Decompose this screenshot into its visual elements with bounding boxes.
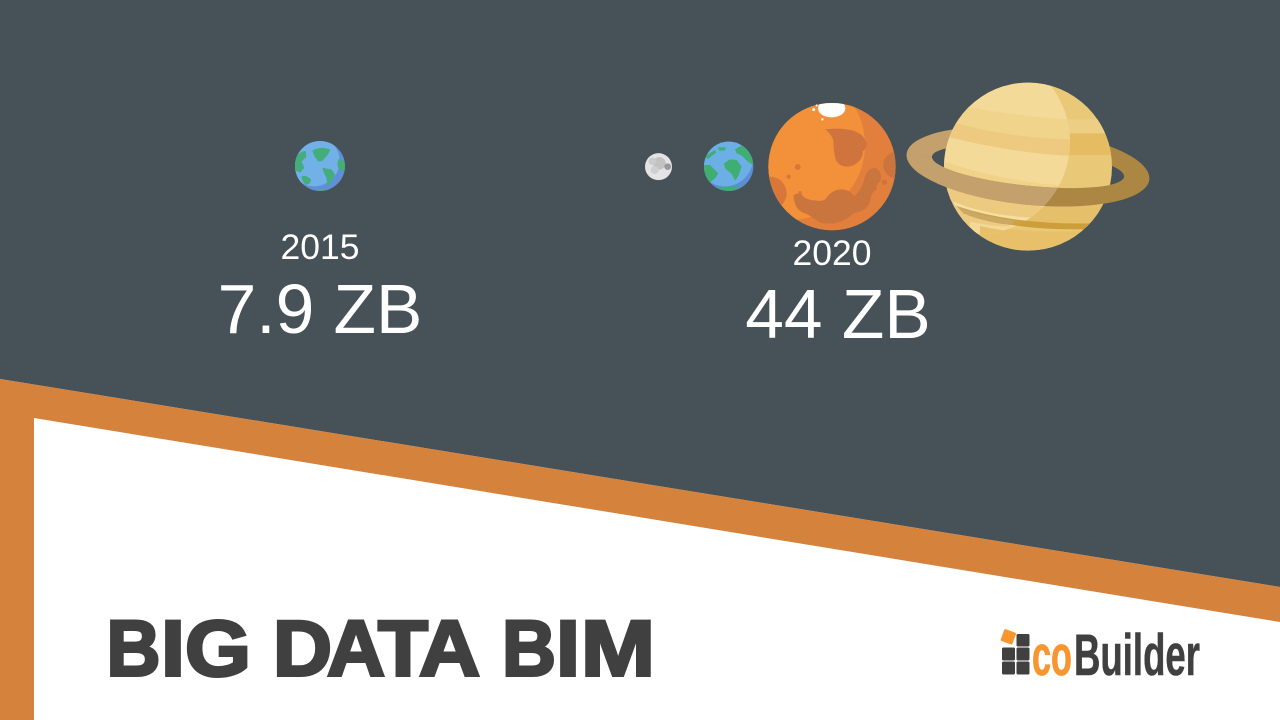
white lower panel: [0, 379, 1280, 720]
mars lit side: [768, 103, 865, 220]
mars ice dots: [812, 104, 823, 120]
title: A: [419, 604, 478, 692]
mars lower dark region: [793, 168, 881, 224]
title: I: [556, 604, 580, 692]
logo word: co: co: [1032, 624, 1072, 688]
saturn back ring: [906, 130, 1150, 204]
title: A: [327, 604, 385, 692]
title: T: [378, 604, 428, 692]
icon: saturn: [906, 82, 1150, 251]
logo mark: [1000, 629, 1030, 674]
title: B: [502, 604, 556, 692]
icon: earth 2020: [704, 142, 754, 191]
icon: mars: [768, 103, 896, 230]
logo word: Builder: Builder: [1074, 623, 1200, 688]
saturn globe: [944, 82, 1112, 251]
label: 2020: 2020: [793, 233, 871, 273]
mars ice cap: [818, 103, 846, 118]
mars upper dark region: [825, 129, 867, 167]
title: I: [161, 604, 185, 692]
label: 2015: 2015: [281, 227, 359, 267]
value: 44 ZB: 44 ZB: [745, 275, 931, 353]
title: M: [581, 604, 655, 692]
value: 7.9 ZB: 7.9 ZB: [218, 270, 422, 348]
orange diagonal frame: [0, 379, 1280, 720]
title: D: [273, 604, 332, 692]
title: G: [185, 604, 251, 692]
mars craters: [769, 152, 896, 206]
saturn front ring: [906, 154, 1150, 206]
icon: moon: [645, 153, 672, 180]
icon: earth 2015: [295, 141, 345, 191]
title: B: [106, 604, 160, 692]
saturn lower stripe: [957, 206, 1090, 229]
logo: coBuilder: [1000, 623, 1200, 688]
